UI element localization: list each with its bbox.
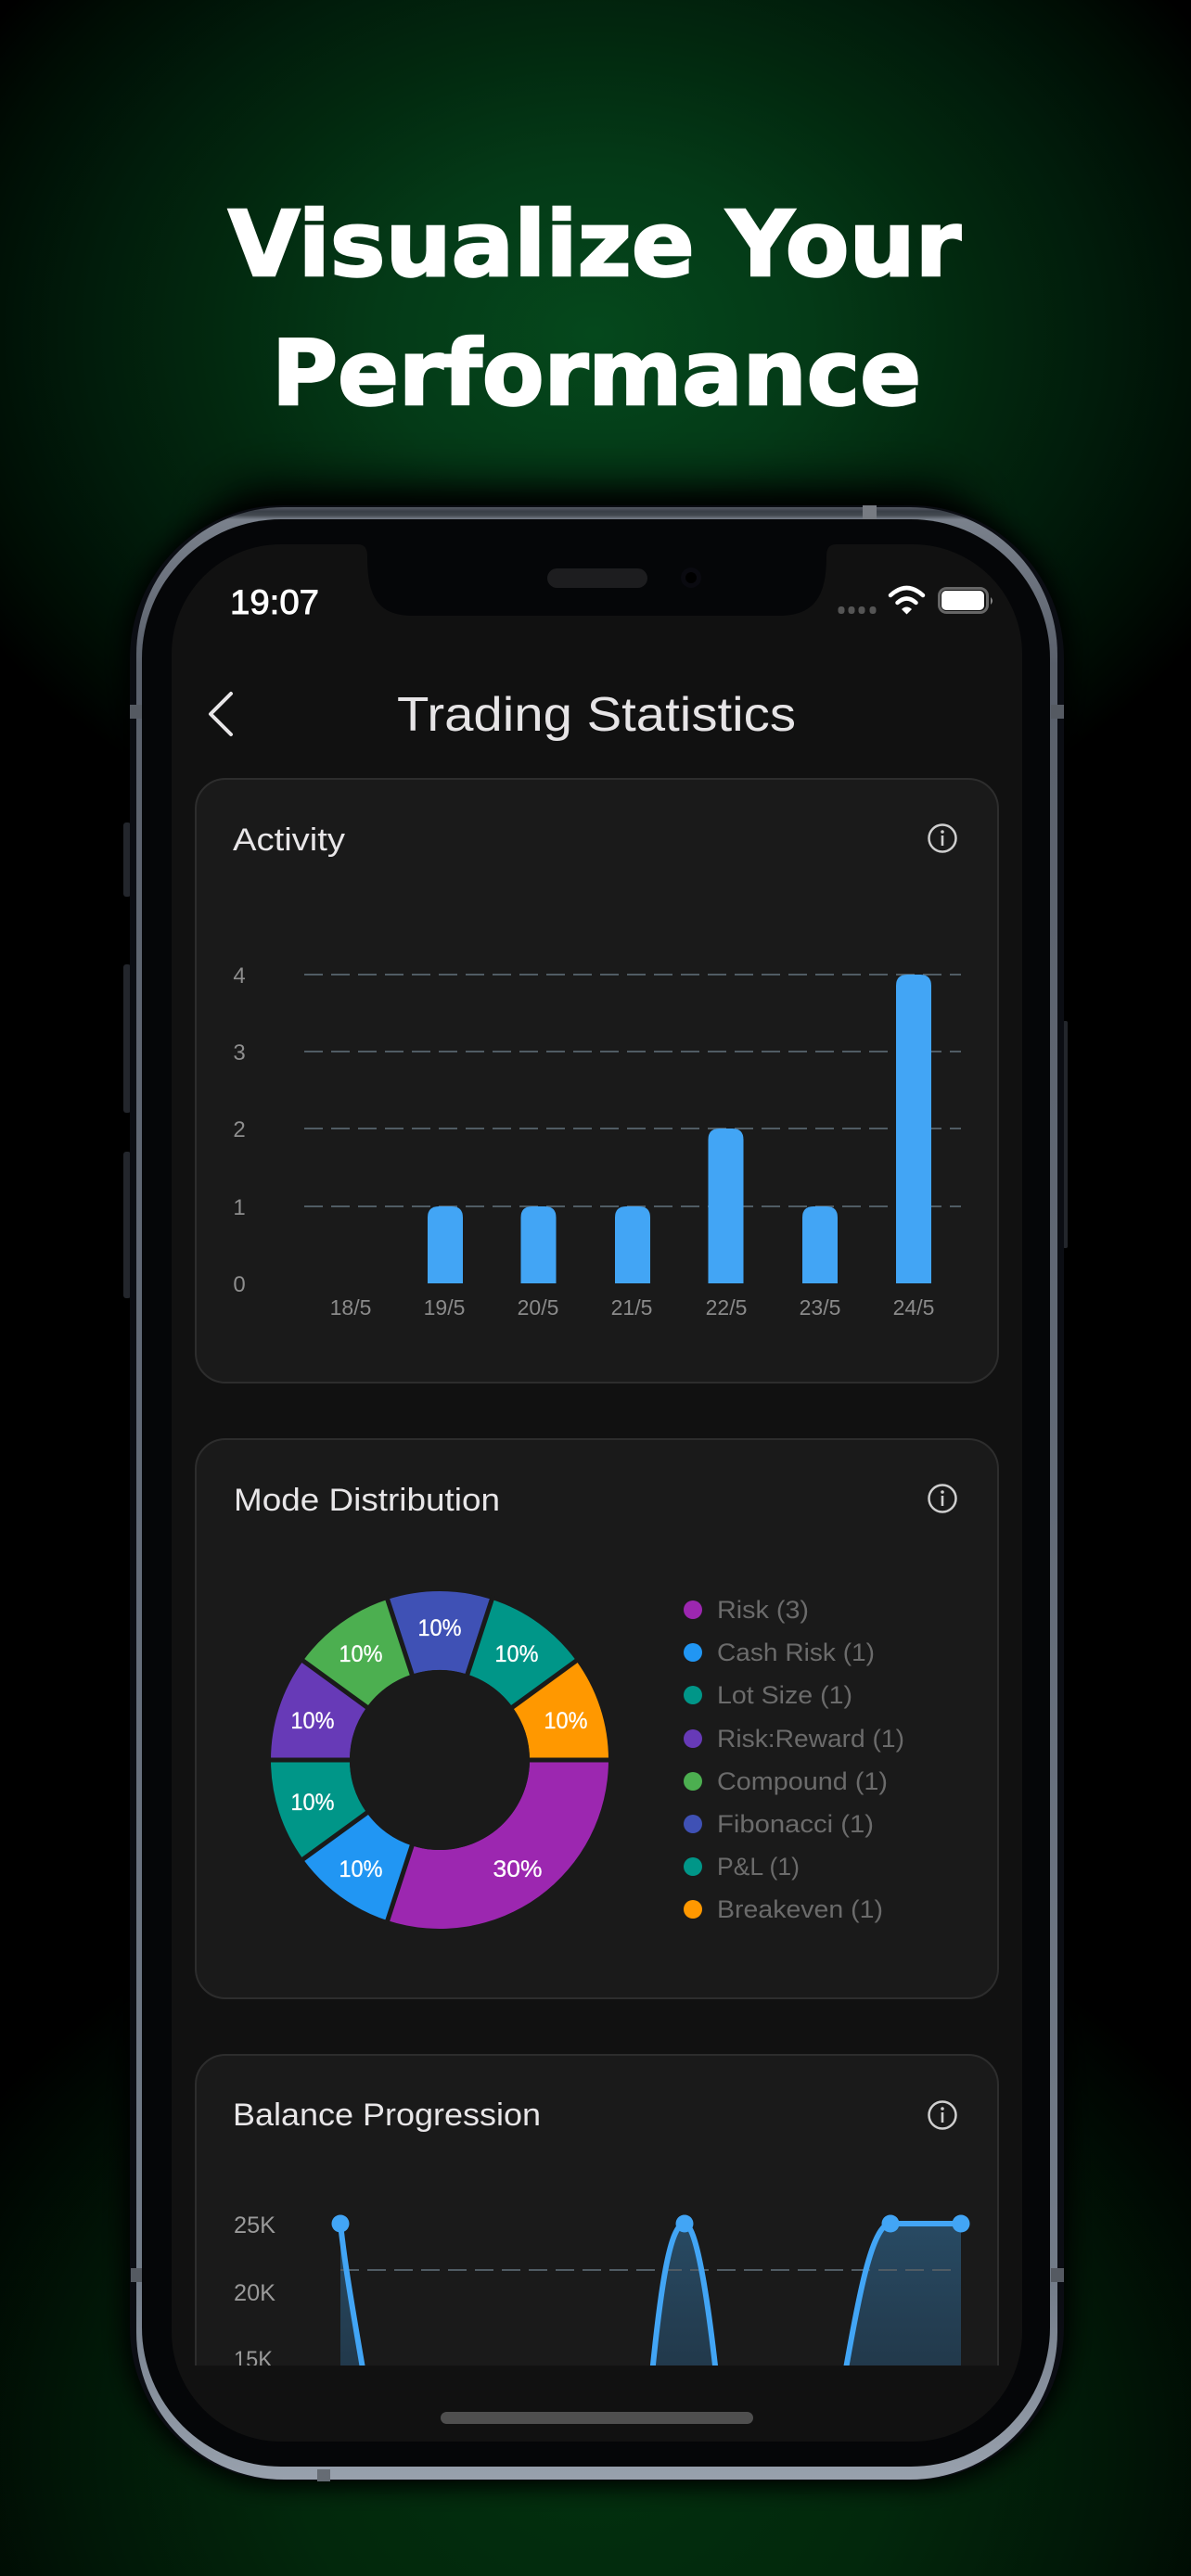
bar chart: activity	[233, 963, 961, 1320]
screen heading: Trading Statistics	[397, 688, 796, 742]
speaker	[547, 568, 647, 588]
legend: Fibonacci (1)	[717, 1810, 874, 1838]
y axis labels: 1	[233, 1195, 246, 1220]
x axis labels: 24/5	[893, 1295, 934, 1320]
title	[228, 192, 961, 426]
donut percentage labels: 10%	[417, 1615, 462, 1641]
back arrow	[211, 694, 231, 734]
y axis labels	[233, 963, 246, 1297]
x axis labels: 20/5	[518, 1295, 558, 1320]
y axis labels	[234, 2213, 275, 2373]
x axis labels: 23/5	[800, 1295, 840, 1320]
notch	[358, 544, 836, 616]
icon: info	[929, 1486, 955, 1511]
y axis labels: 2	[233, 1117, 246, 1142]
legend: Lot Size (1)	[717, 1681, 852, 1709]
donut percentage labels: 10%	[291, 1708, 334, 1734]
donut chart	[267, 1591, 612, 1929]
phone mockup	[123, 487, 1070, 2487]
status bar: time: 19:07	[230, 582, 319, 621]
y axis labels: 20K	[234, 2280, 275, 2306]
legend: Breakeven (1)	[717, 1895, 883, 1923]
panel: mode distribution	[196, 1439, 998, 1998]
legend: Risk (3)	[717, 1596, 809, 1624]
heading: activity: Activity	[233, 823, 345, 858]
heading: mode distribution: Mode Distribution	[234, 1483, 500, 1518]
y axis labels: 25K	[234, 2213, 275, 2238]
x axis labels: 19/5	[424, 1295, 465, 1320]
icon: info	[929, 2101, 955, 2129]
donut percentage labels	[291, 1615, 588, 1882]
x axis labels: 22/5	[706, 1295, 747, 1320]
donut percentage labels: 10%	[544, 1708, 588, 1734]
y axis labels: 3	[233, 1040, 246, 1065]
line chart	[332, 2214, 970, 2374]
donut percentage labels: 30%	[493, 1856, 542, 1882]
heading: balance progression: Balance Progression	[233, 2098, 541, 2133]
panel: balance progression	[195, 2054, 999, 2366]
legend: P&L (1)	[717, 1853, 800, 1881]
x axis labels	[330, 1295, 934, 1320]
legend: Risk:Reward (1)	[717, 1725, 904, 1753]
status bar: signal dots	[839, 606, 876, 614]
y axis labels: 0	[233, 1272, 246, 1297]
panel: activity	[196, 779, 998, 1383]
title: Performance	[272, 321, 921, 426]
y axis labels: 15K	[234, 2347, 273, 2373]
title: Visualize Your	[228, 192, 961, 297]
donut percentage labels: 10%	[339, 1641, 382, 1667]
side buttons	[123, 823, 1068, 1298]
home indicator	[441, 2412, 753, 2424]
legend: Cash Risk (1)	[717, 1639, 875, 1666]
x axis labels: 18/5	[330, 1295, 371, 1320]
icon: info	[929, 825, 955, 851]
phone frame	[130, 505, 1064, 2481]
y axis labels: 4	[233, 963, 246, 988]
legend	[684, 1596, 904, 1923]
camera	[681, 567, 701, 588]
legend: Compound (1)	[717, 1767, 888, 1795]
donut percentage labels: 10%	[339, 1856, 382, 1882]
icon: battery	[939, 588, 992, 612]
bars	[428, 975, 931, 1283]
donut percentage labels: 10%	[291, 1790, 334, 1816]
x axis labels: 21/5	[611, 1295, 652, 1320]
icon: wifi	[890, 588, 923, 614]
screen	[172, 544, 1022, 2442]
donut percentage labels: 10%	[495, 1641, 538, 1667]
